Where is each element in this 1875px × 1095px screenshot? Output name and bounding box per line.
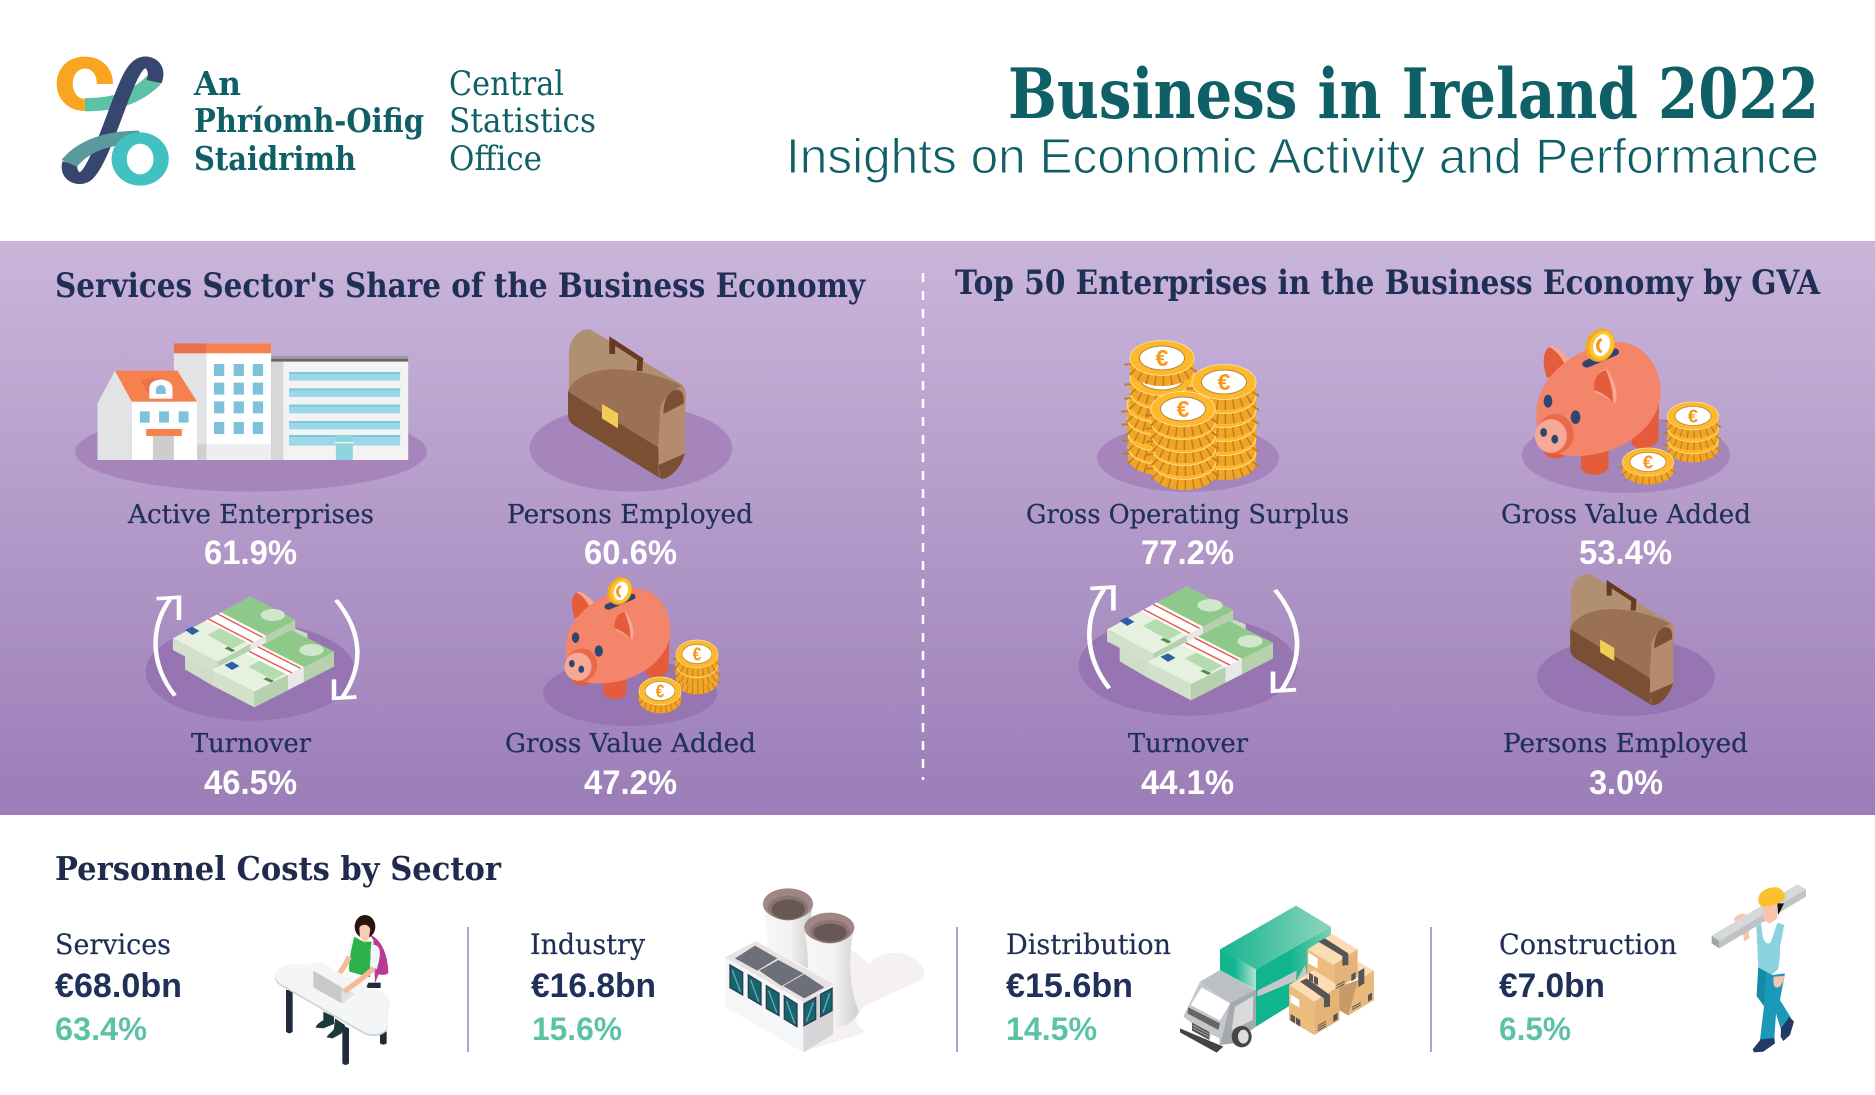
icon: construction worker [1712, 884, 1806, 1052]
icon: briefcase [1537, 574, 1715, 716]
icon: buildings [75, 343, 427, 492]
icon: piggy bank [543, 575, 718, 726]
icon: person at desk [275, 915, 389, 1065]
subtitle: Insights on Economic Activity and Performance [786, 130, 1819, 184]
logo text english: Statistics [449, 101, 596, 140]
label: gross operating surplus: Gross Operating Surplus [1026, 499, 1349, 530]
purple band panel [0, 241, 1875, 815]
value: gross operating surplus: 77.2% [1141, 534, 1234, 572]
panel: top 50 enterprises [955, 263, 1821, 802]
icon: money with arrows [1079, 586, 1297, 716]
label: persons employed: Persons Employed [1503, 728, 1748, 759]
sector: services: Services [55, 928, 171, 961]
sector: distribution: 14.5% [1006, 1011, 1097, 1047]
sector: services: 63.4% [55, 1011, 147, 1047]
panel: services sector share [55, 266, 866, 802]
logo text irish: Phríomh-Oifig [194, 101, 424, 140]
label: gross value added: Gross Value Added [505, 728, 756, 759]
logo text english [449, 64, 596, 178]
logo text irish [193, 64, 424, 178]
panel: personnel costs by sector [55, 849, 1806, 1065]
icon: coin pile [1097, 340, 1279, 492]
sector: construction: Construction [1499, 928, 1677, 961]
value: active enterprises: 61.9% [204, 534, 297, 572]
label: persons employed: Persons Employed [507, 499, 753, 530]
logo text english: Central [449, 64, 564, 103]
icon: briefcase [530, 329, 732, 492]
logo text irish: Staidrimh [194, 139, 356, 178]
sector: services: €68.0bn [55, 967, 182, 1005]
divider [956, 927, 958, 1052]
logo mark [65, 62, 161, 180]
icon: factory [725, 888, 925, 1052]
icon: delivery truck and boxes [1180, 906, 1374, 1053]
dashed divider [922, 273, 924, 780]
sector: industry [530, 928, 656, 1047]
sector: services [55, 928, 182, 1047]
label: turnover: Turnover [191, 728, 311, 759]
value: turnover: 46.5% [204, 764, 297, 802]
heading: Personnel Costs by Sector [55, 849, 502, 888]
sector: industry: 15.6% [532, 1011, 622, 1047]
value: persons employed: 60.6% [584, 534, 677, 572]
value: gross value added: 47.2% [584, 764, 677, 802]
header [65, 54, 1819, 184]
sector: industry: Industry [530, 928, 645, 961]
value: persons employed: 3.0% [1589, 764, 1663, 802]
label: turnover: Turnover [1128, 728, 1248, 759]
label: active enterprises: Active Enterprises [127, 499, 374, 530]
value: gross value added: 53.4% [1579, 534, 1672, 572]
icon: piggy bank [1522, 326, 1730, 493]
sector: construction: €7.0bn [1499, 967, 1605, 1005]
sector: industry: €16.8bn [531, 967, 656, 1005]
sector: construction [1499, 928, 1677, 1047]
divider [467, 927, 469, 1052]
value: turnover: 44.1% [1141, 764, 1234, 802]
sector: distribution: Distribution [1006, 928, 1171, 961]
heading: Services Sector's Share of the Business Economy [55, 266, 866, 306]
logo text irish: An [193, 64, 241, 103]
sector: construction: 6.5% [1499, 1011, 1571, 1047]
icon: money with arrows [146, 597, 357, 721]
sector: distribution [1006, 928, 1171, 1047]
label: gross value added: Gross Value Added [1501, 499, 1751, 530]
divider [1430, 927, 1432, 1052]
sector: distribution: €15.6bn [1006, 967, 1133, 1005]
logo text english: Office [449, 139, 542, 178]
